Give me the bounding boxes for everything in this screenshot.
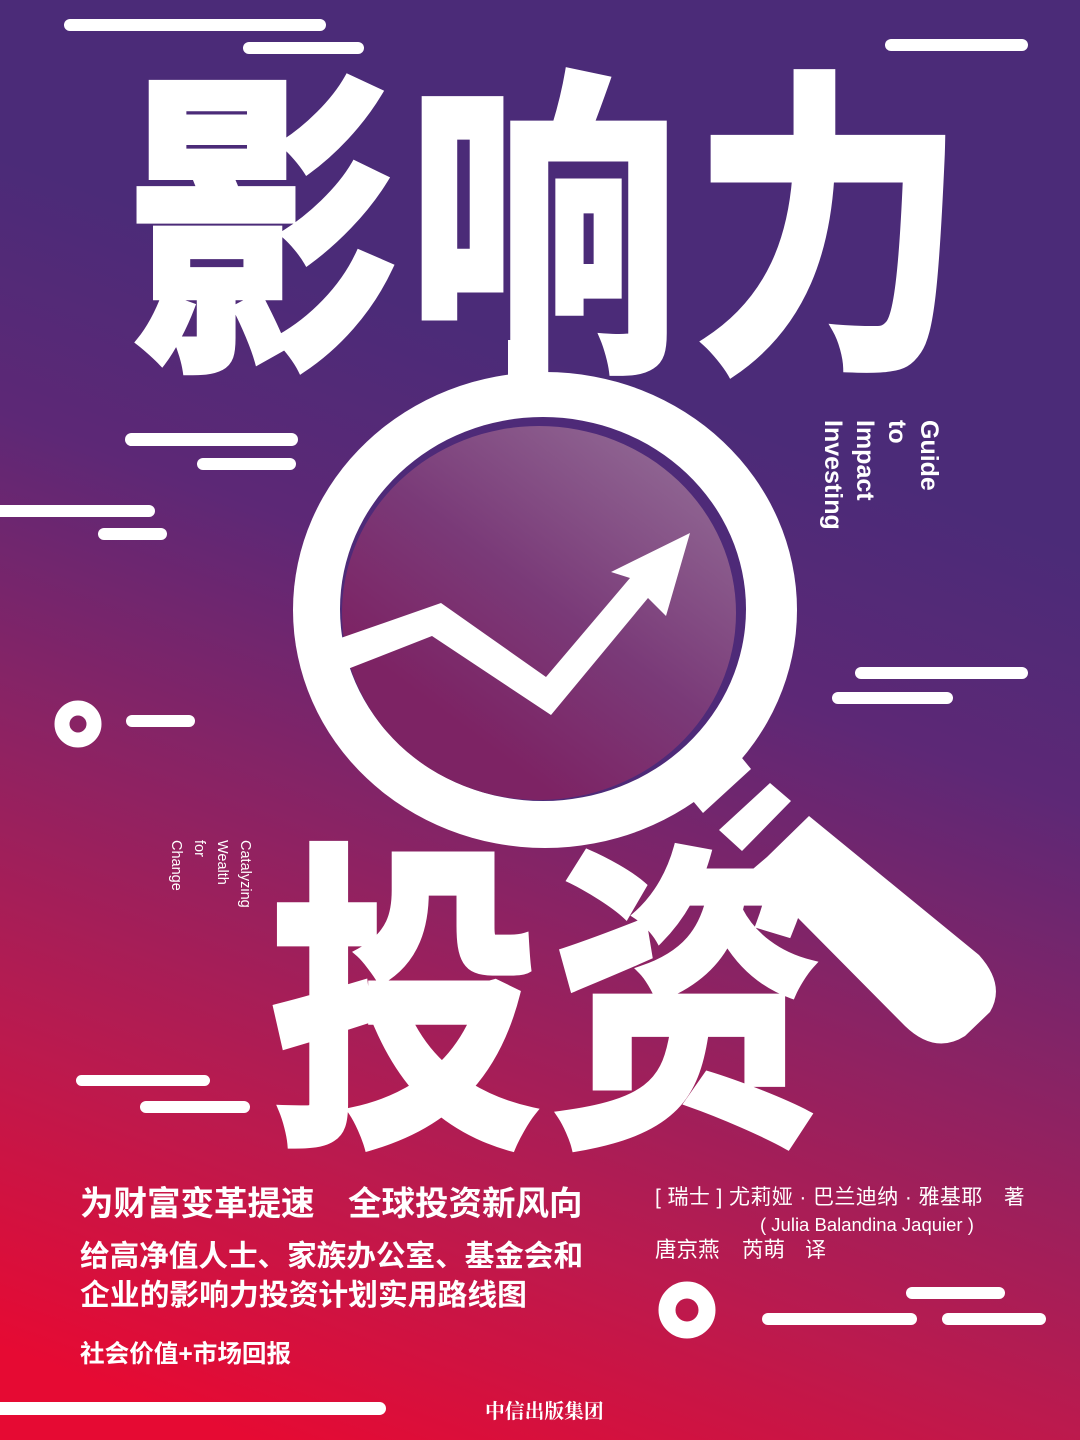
English title: Guide to Impact Investing: Investing <box>819 420 847 530</box>
decorative bars: right middle <box>832 667 1028 704</box>
chart arrow <box>335 533 690 715</box>
author credits <box>655 1186 1024 1262</box>
decorative bars: left middle <box>0 433 298 540</box>
tagline text block <box>80 1186 583 1368</box>
decorative bar: bottom left <box>0 1402 386 1415</box>
decorative bars: top <box>64 19 1028 54</box>
icon: small ring with dash <box>62 708 195 740</box>
magnifier stem into title <box>508 340 548 390</box>
English title: Guide to Impact Investing: Guide <box>915 420 943 491</box>
title: 投资 <box>270 747 822 1211</box>
title: 影响力 <box>128 0 964 435</box>
English subtitle: Catalyzing Wealth for Change: Change <box>168 840 184 891</box>
English title: Guide to Impact Investing: to <box>883 420 911 444</box>
translate mark: 译 <box>805 1239 826 1262</box>
English subtitle: Catalyzing Wealth for Change: Catalyzing <box>237 840 253 908</box>
English title: Guide to Impact Investing <box>819 420 943 530</box>
author mark: 著 <box>1004 1186 1024 1209</box>
English title: Guide to Impact Investing: Impact <box>851 420 879 501</box>
author latin name: ( Julia Balandina Jaquier ) <box>760 1214 974 1235</box>
title: 投资: 资 <box>552 747 822 1211</box>
magnifier white ring <box>293 372 797 848</box>
English subtitle: Catalyzing Wealth for Change: for <box>191 840 207 857</box>
description line 2: 企业的影响力投资计划实用路线图 <box>80 1279 527 1312</box>
magnifier handle <box>740 816 996 1044</box>
slogan: 社会价值+市场回报 <box>80 1340 291 1368</box>
magnifier handle piece <box>719 783 791 851</box>
description line 1: 给高净值人士、家族办公室、基金会和 <box>80 1240 583 1273</box>
English subtitle: Catalyzing Wealth for Change <box>168 840 253 908</box>
translators: 唐京燕 <box>655 1238 720 1262</box>
tagline line 1 second part: 全球投资新风向 <box>348 1186 582 1223</box>
title: 投资: 投 <box>270 747 540 1211</box>
decorative bars: lower left <box>76 1075 250 1113</box>
translator two: 芮萌 <box>742 1238 785 1262</box>
icon: magnifying glass <box>293 340 996 1044</box>
magnifier collar <box>690 750 751 813</box>
English subtitle: Catalyzing Wealth for Change: Wealth <box>214 840 230 885</box>
magnifier lens <box>340 417 746 801</box>
publisher: 中信出版集团 <box>485 1401 604 1423</box>
tagline line 1: 为财富变革提速 <box>80 1186 314 1223</box>
author name: [ 瑞士 ] 尤莉娅 · 巴兰迪纳 · 雅基耶 <box>655 1186 983 1209</box>
icon: large ring <box>667 1290 707 1330</box>
decorative bars: bottom right <box>762 1287 1046 1325</box>
